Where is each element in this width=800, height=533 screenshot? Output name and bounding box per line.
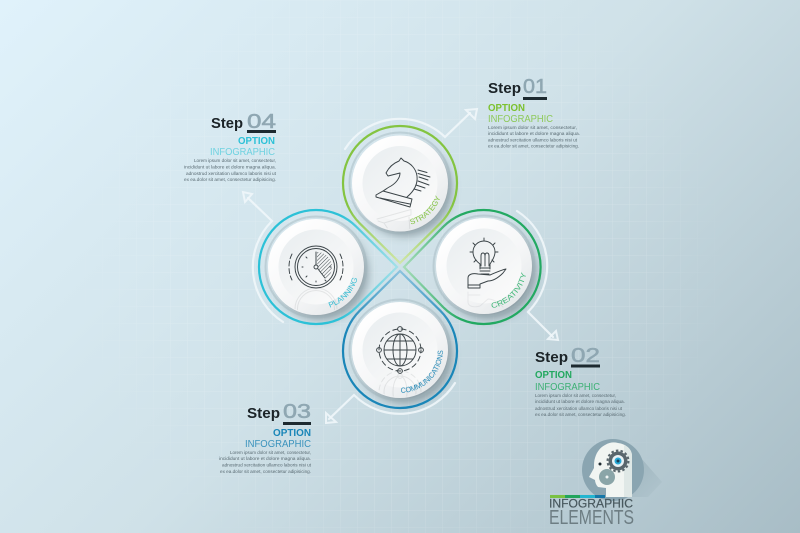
- icon: head with gears: [582, 439, 662, 501]
- text block: step 3: OPTION: [273, 428, 311, 439]
- panel: step 1 drop (strategy): [342, 124, 458, 264]
- text block: step 1: ex ea.dolor sit amet, consectetur adipisicing.: [488, 144, 579, 150]
- arrow: step 2: [517, 211, 558, 340]
- text block: step 3: adnostrud xercitation ullamco laboris nisi ut: [222, 462, 312, 468]
- arrow: step 3: [326, 383, 455, 423]
- label: strategy: STRATEGY: [410, 196, 440, 224]
- text block: step 1: 01: [523, 75, 547, 98]
- text block: step 1: incididunt ut labore et dolore magna aliqua.: [488, 131, 580, 137]
- text block: step 4: ex ea.dolor sit amet, consectetur adipisicing.: [184, 177, 276, 183]
- text block: step 2: ex ea.dolor sit amet, consectetur adipisicing.: [535, 412, 626, 418]
- text block: step 4: 04: [247, 110, 276, 133]
- text block: step 3: ex ea.dolor sit amet, consectetur adipisicing.: [220, 469, 311, 475]
- logo: infographic elements: [549, 439, 662, 529]
- icon: globe: [377, 327, 423, 373]
- text block: step 3: incididunt ut labore et dolore magna aliqua.: [219, 456, 311, 462]
- text block: step 4: INFOGRAPHIC: [210, 146, 275, 158]
- arrow: step 1: [345, 109, 477, 149]
- text block: step 1: Lorem ipsum dolor sit amet, consectetur,: [488, 125, 577, 131]
- text block: step 2: Step: [535, 349, 568, 366]
- text block: step 2: INFOGRAPHIC: [535, 381, 600, 393]
- icon reflection: bulb hand: [468, 292, 503, 307]
- text block: step 4: OPTION: [238, 136, 275, 147]
- icon: clock: [289, 246, 343, 288]
- text block: step 2: Lorem ipsum dolor sit amet, consectetur,: [535, 393, 616, 399]
- logo: infographic elements: ELEMENTS: [549, 507, 634, 529]
- text block: step 1: Step: [488, 80, 521, 97]
- text block: step 2: 02: [571, 344, 600, 367]
- text block: step 3: Step: [247, 405, 280, 422]
- panel: step 3 drop (communications): [342, 270, 458, 410]
- icon reflection: clock: [294, 288, 338, 310]
- text block: step 4: adnostrud xercitation ullamco laboris nisi ut: [186, 171, 277, 177]
- label: creativity: CREATIVITY: [492, 272, 526, 308]
- label: communications: COMMUNICATIONS: [401, 350, 443, 393]
- logo: infographic elements: INFOGRAPHIC: [549, 498, 633, 510]
- text block: step 1: [488, 75, 580, 150]
- colour bar: [550, 495, 605, 498]
- icon reflection: globe: [378, 370, 422, 396]
- background grid: [153, 34, 664, 533]
- panel: step 2 drop (creativity): [402, 208, 542, 326]
- text block: step 3: Lorem ipsum dolor sit amet, consectetur,: [230, 450, 311, 456]
- text block: step 4: incididunt ut labore et dolore magna aliqua.: [184, 164, 276, 170]
- icon: light bulb in hand: [468, 238, 506, 288]
- text block: step 3: 03: [283, 400, 311, 423]
- icon reflection: pedestal: [377, 210, 411, 232]
- text block: step 4: Step: [211, 115, 243, 132]
- panel: step 4 drop (planning): [258, 208, 398, 326]
- text block: step 3: [219, 400, 312, 475]
- text block: step 1: OPTION: [488, 103, 525, 114]
- text block: step 1: adnostrud xercitation ullamco laboris nisi ut: [488, 138, 578, 144]
- text block: step 4: Lorem ipsum dolor sit amet, consectetur,: [194, 158, 276, 164]
- icon: chess knight: [376, 158, 430, 207]
- text block: step 2: [535, 344, 626, 418]
- label: planning: PLANNING: [328, 278, 357, 308]
- text block: step 4: [184, 110, 277, 183]
- text block: step 2: adnostrud xercitation ullamco laboris nisi ut: [535, 406, 623, 412]
- text block: step 2: OPTION: [535, 370, 572, 381]
- text block: step 2: incididunt ut labore et dolore magna aliqua.: [535, 399, 625, 405]
- text block: step 3: INFOGRAPHIC: [245, 438, 311, 450]
- text block: step 1: INFOGRAPHIC: [488, 113, 553, 125]
- arrow: step 4: [243, 192, 283, 322]
